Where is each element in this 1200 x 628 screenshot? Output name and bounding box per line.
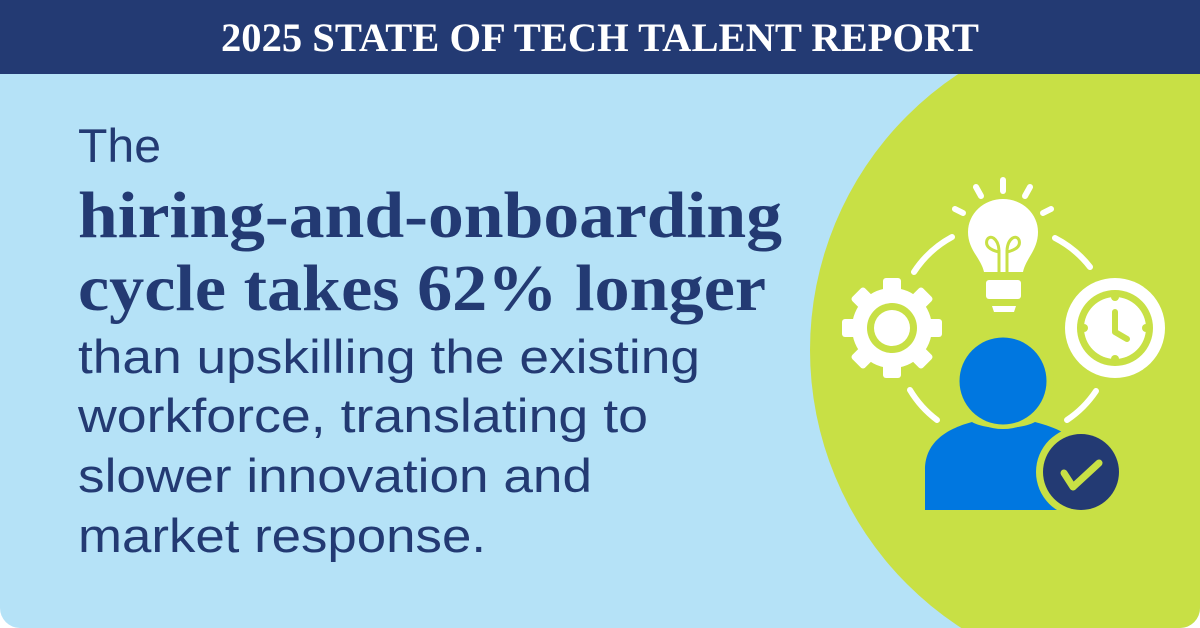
headline text block <box>77 119 782 562</box>
header title: 2025 STATE OF TECH TALENT REPORT <box>221 15 979 60</box>
dashed ring arcs <box>910 237 1096 420</box>
icon: check badge <box>1036 427 1126 517</box>
icon: clock <box>1065 278 1165 378</box>
green circle <box>810 19 1200 628</box>
icon: person with gear, bulb, clock <box>842 180 1165 517</box>
icon: person <box>925 333 1062 510</box>
headline text block: workforce, translating to <box>77 389 648 442</box>
headline text block: market response. <box>78 509 486 562</box>
headline text block: slower innovation and <box>78 449 592 502</box>
icon: gear <box>842 278 942 378</box>
headline text block: The <box>78 119 161 172</box>
headline text block: cycle takes 62% longer <box>78 252 766 325</box>
headline text block: than upskilling the existing <box>78 330 700 383</box>
headline text block: hiring-and-onboarding <box>78 179 782 252</box>
icon: lightbulb <box>955 180 1051 312</box>
header bar <box>0 0 1200 74</box>
